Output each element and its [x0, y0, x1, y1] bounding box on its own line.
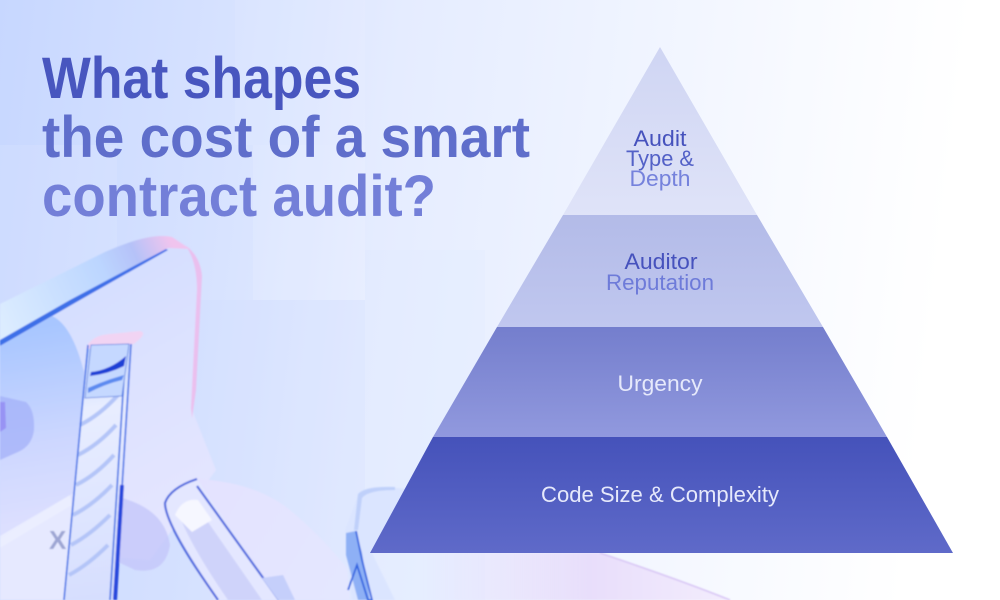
glass slab body [0, 236, 216, 560]
small slab light body [197, 479, 350, 600]
tier: urgency [433, 327, 887, 437]
column wave reflections [69, 395, 118, 575]
tier: code size and complexity [370, 437, 953, 553]
tier: audit type and depth: Depth [630, 166, 690, 191]
tier: audit type and depth: Audit [634, 126, 687, 151]
glass column [63, 339, 130, 600]
column top panel with dark waves [85, 344, 129, 398]
small slab outline [165, 479, 279, 600]
title [42, 46, 530, 229]
title line 1: What shapes [42, 46, 361, 111]
lower left floor [0, 505, 72, 600]
illustration: glass shapes [0, 236, 730, 600]
slab pink right edge [186, 246, 202, 418]
column edges [64, 344, 131, 600]
tier: code size and complexity: Code Size & Complexity [541, 482, 780, 507]
tier: urgency: Urgency [618, 371, 703, 396]
column top highlight [86, 331, 143, 349]
tier: auditor reputation [497, 215, 823, 327]
slab blue edge line [0, 249, 168, 346]
slab inner blue face [0, 316, 84, 540]
pyramid [370, 47, 953, 553]
right glass piece [345, 487, 420, 600]
tier: audit type and depth [563, 47, 757, 215]
foot shape behind column [118, 498, 170, 571]
title line 2: the cost of a smart [42, 105, 530, 170]
pink glow slab [420, 553, 730, 600]
slab lower pale strip [0, 495, 72, 548]
reflection blob [0, 396, 34, 460]
title line 3: contract audit? [42, 164, 436, 229]
tier: auditor reputation: Auditor [624, 249, 698, 274]
tier: audit type and depth: Type & [626, 146, 694, 171]
slab top face [0, 236, 190, 343]
small slab panel [164, 479, 280, 600]
tier: auditor reputation: Reputation [606, 270, 714, 295]
logo mark: X [49, 525, 67, 555]
